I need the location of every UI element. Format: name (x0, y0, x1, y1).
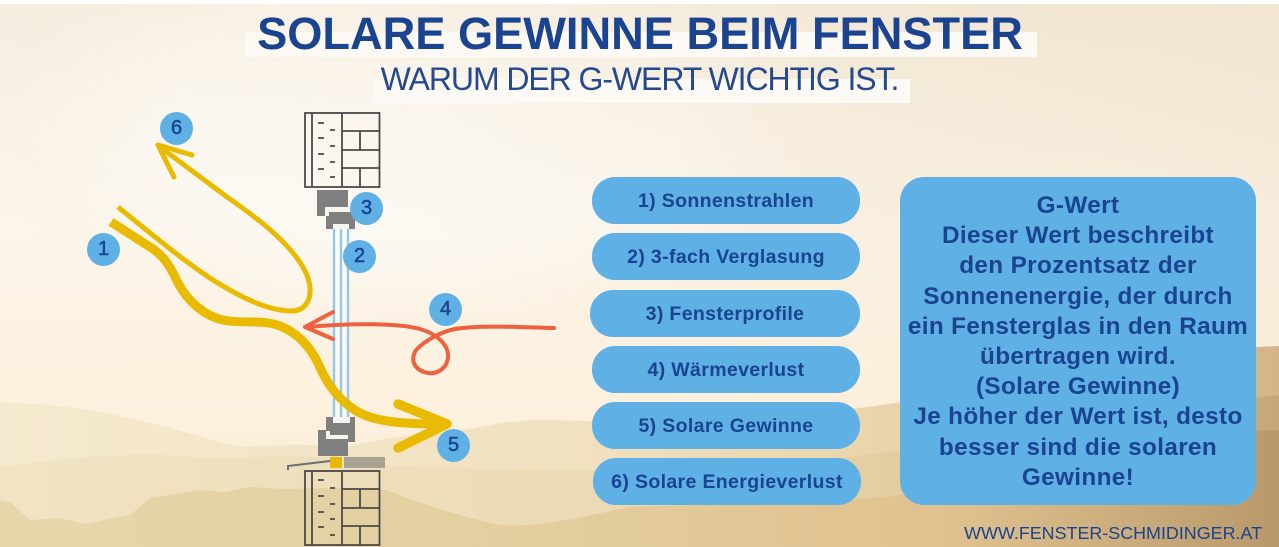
marker 4 (429, 293, 462, 326)
bottom frame profile (318, 417, 355, 456)
panel: G-Wert explanation: den Prozentsatz der (959, 252, 1197, 279)
panel: G-Wert explanation: Sonnenenergie, der durch (923, 283, 1233, 310)
marker 3: 3 (361, 197, 372, 219)
legend pill 6: 6) Solare Energieverlust (611, 471, 843, 493)
panel: G-Wert explanation: G-Wert (1037, 192, 1119, 219)
arrow: solar gains (111, 222, 447, 448)
glass panes (334, 228, 348, 420)
legend pill 6 (593, 458, 861, 505)
panel: G-Wert explanation: besser sind die solaren (939, 434, 1217, 461)
marker 5: 5 (448, 434, 459, 456)
sill and insulation (288, 457, 385, 470)
arrow: heat loss (305, 312, 554, 373)
top frame profile (317, 190, 355, 229)
marker 1 (87, 233, 120, 266)
arrow: reflected solar energy (118, 145, 310, 311)
panel: G-Wert explanation: ein Fensterglas in den Raum (908, 313, 1248, 340)
marker 2: 2 (354, 245, 365, 267)
legend pill 1: 1) Sonnenstrahlen (638, 190, 814, 212)
marker 5 (437, 429, 470, 462)
legend pill 2: 2) 3-fach Verglasung (627, 246, 825, 268)
marker 1: 1 (98, 238, 109, 260)
legend pill 3: 3) Fensterprofile (646, 303, 804, 325)
marker 2 (343, 240, 376, 273)
marker 6: 6 (171, 117, 182, 139)
legend pill 1 (592, 177, 860, 224)
legend pill 3 (590, 290, 860, 337)
panel: G-Wert explanation: übertragen wird. (980, 343, 1176, 370)
wall bottom (305, 471, 380, 545)
title: SOLARE GEWINNE BEIM FENSTER (257, 8, 1023, 59)
marker 3 (350, 192, 383, 225)
legend pill 4 (592, 346, 860, 393)
legend pill 4: 4) Wärmeverlust (648, 359, 804, 381)
panel: G-Wert explanation: (Solare Gewinne) (976, 373, 1180, 400)
panel: G-Wert explanation: Dieser Wert beschreibt (942, 222, 1214, 249)
legend pill 2 (592, 233, 860, 280)
panel: G-Wert explanation: Je höher der Wert ist, desto (913, 403, 1243, 430)
legend pill 5 (592, 402, 860, 449)
panel: G-Wert explanation (900, 177, 1256, 505)
wall top (305, 113, 380, 187)
panel: G-Wert explanation: Gewinne! (1022, 464, 1134, 491)
subtitle: WARUM DER G-WERT WICHTIG IST. (381, 61, 898, 97)
legend pill 5: 5) Solare Gewinne (638, 415, 814, 437)
website url: WWW.FENSTER-SCHMIDINGER.AT (964, 523, 1262, 543)
marker 6 (160, 112, 193, 145)
marker 4: 4 (440, 298, 451, 320)
